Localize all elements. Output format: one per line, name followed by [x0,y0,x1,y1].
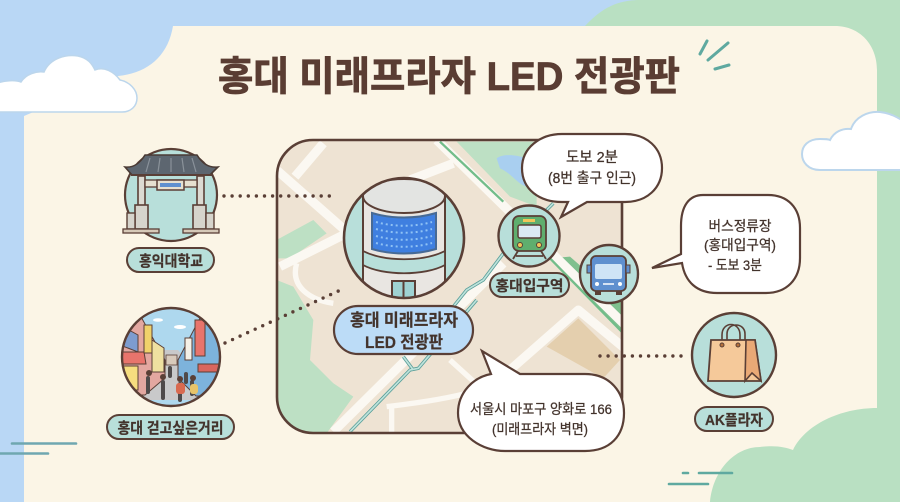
map panel [277,140,627,437]
label: main: LED 전광판 [365,333,443,352]
map green route [440,142,623,333]
callout: address: (미래프라자 벽면) [492,421,588,437]
map roads [277,140,627,437]
label: Hongik station: 홍대입구역 [496,278,564,295]
label: Hongik University: 홍익대학교 [139,253,203,270]
decorative spark marks [700,41,729,69]
cloud: top left [0,56,137,112]
dotted connector: university [224,194,336,198]
map teal path [350,203,553,432]
label: AK plaza: AK플라자 [705,412,763,429]
label: main [334,306,473,354]
icon: train [498,206,560,266]
dotted connector: AK plaza [600,354,688,358]
dotted connector: street [225,288,345,343]
label: main: 홍대 미래프라자 [350,311,458,330]
label: AK plaza [695,407,773,431]
icon: bus [580,245,638,303]
icon: walking street [120,308,222,406]
callout: address [458,351,624,451]
callout: bus stop: (홍대입구역) [704,237,776,253]
callout: bus stop: 버스정류장 [708,218,772,234]
left accent lines [0,444,76,454]
callout: station walk [522,134,662,217]
title: 홍대 미래프라자 LED 전광판 [218,55,680,99]
label: walking street [107,415,234,439]
label: walking street: 홍대 걷고싶은거리 [118,420,224,437]
cloud: right [802,112,900,170]
callout: station walk: (8번 출구 인근) [548,170,636,187]
callout: address: 서울시 마포구 양화로 166 [470,401,612,417]
icon: shopping bag [692,313,776,397]
callout: bus stop [652,195,800,293]
map parks and water [277,142,623,433]
label: Hongik station [490,273,569,297]
callout: bus stop: - 도보 3분 [708,257,762,273]
label: Hongik University [127,248,214,272]
icon: LED building [344,178,464,310]
callout: station walk: 도보 2분 [566,150,618,166]
right accent lines [669,473,732,484]
icon: university gate [123,149,219,241]
